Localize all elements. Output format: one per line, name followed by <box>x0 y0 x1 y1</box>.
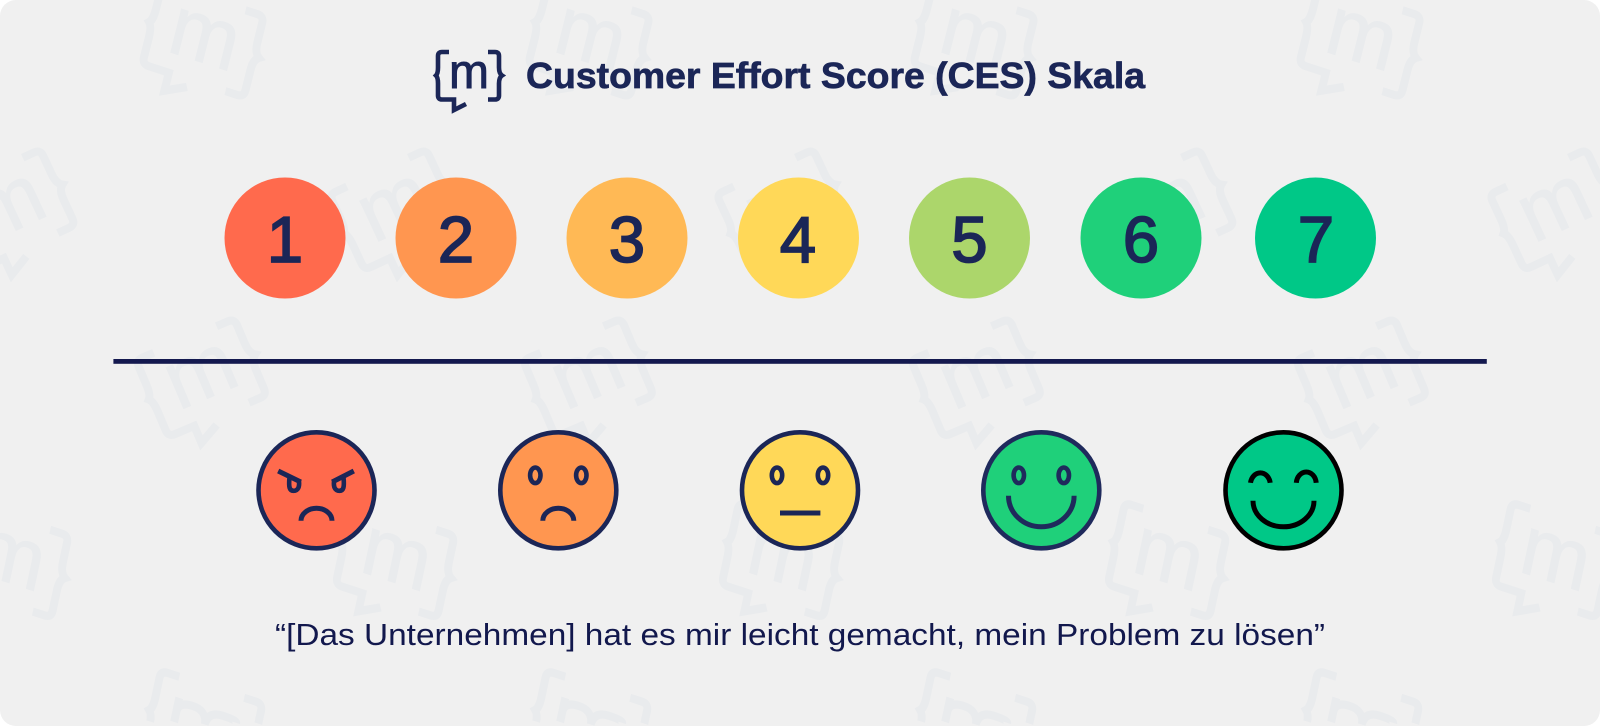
score 3 <box>566 178 688 298</box>
score 5: 5 <box>951 203 988 276</box>
infographic canvas: m <box>1309 314 1410 427</box>
score 7 <box>1255 178 1376 298</box>
infographic canvas: m <box>924 314 1025 427</box>
score 2 <box>396 178 516 298</box>
quote text: “[Das Unternehmen] hat es mir leicht gemacht, mein Problem zu lösen” <box>275 617 1325 652</box>
score 5 <box>909 178 1030 298</box>
score 1: 1 <box>267 203 303 276</box>
logo <box>436 46 502 110</box>
infographic canvas: m <box>149 314 250 427</box>
infographic canvas: m <box>354 496 441 610</box>
score 6: 6 <box>1123 203 1159 276</box>
score 2: 2 <box>438 203 474 276</box>
score scale 1 to 7 <box>224 178 1376 298</box>
icon: angry face <box>258 432 374 548</box>
icon: happy face <box>983 432 1099 548</box>
infographic canvas: m <box>728 145 832 260</box>
score 3: 3 <box>609 203 645 276</box>
score 1 <box>224 178 346 298</box>
score 4 <box>738 178 859 298</box>
score 6 <box>1080 178 1202 298</box>
score 7: 7 <box>1298 203 1334 276</box>
infographic canvas: m <box>536 314 637 427</box>
logo: m <box>449 46 489 99</box>
icon: neutral face <box>742 432 858 548</box>
score 4: 4 <box>780 203 816 276</box>
infographic canvas: m <box>1126 496 1213 610</box>
icon: sad face <box>500 432 616 548</box>
icon: very happy face <box>1226 432 1342 548</box>
faces row <box>258 432 1342 548</box>
infographic canvas: m <box>341 145 445 260</box>
infographic canvas: m <box>1114 145 1218 260</box>
infographic canvas: m <box>740 496 827 610</box>
infographic canvas: m <box>1513 496 1600 610</box>
title: Customer Effort Score (CES) Skala <box>526 55 1146 96</box>
